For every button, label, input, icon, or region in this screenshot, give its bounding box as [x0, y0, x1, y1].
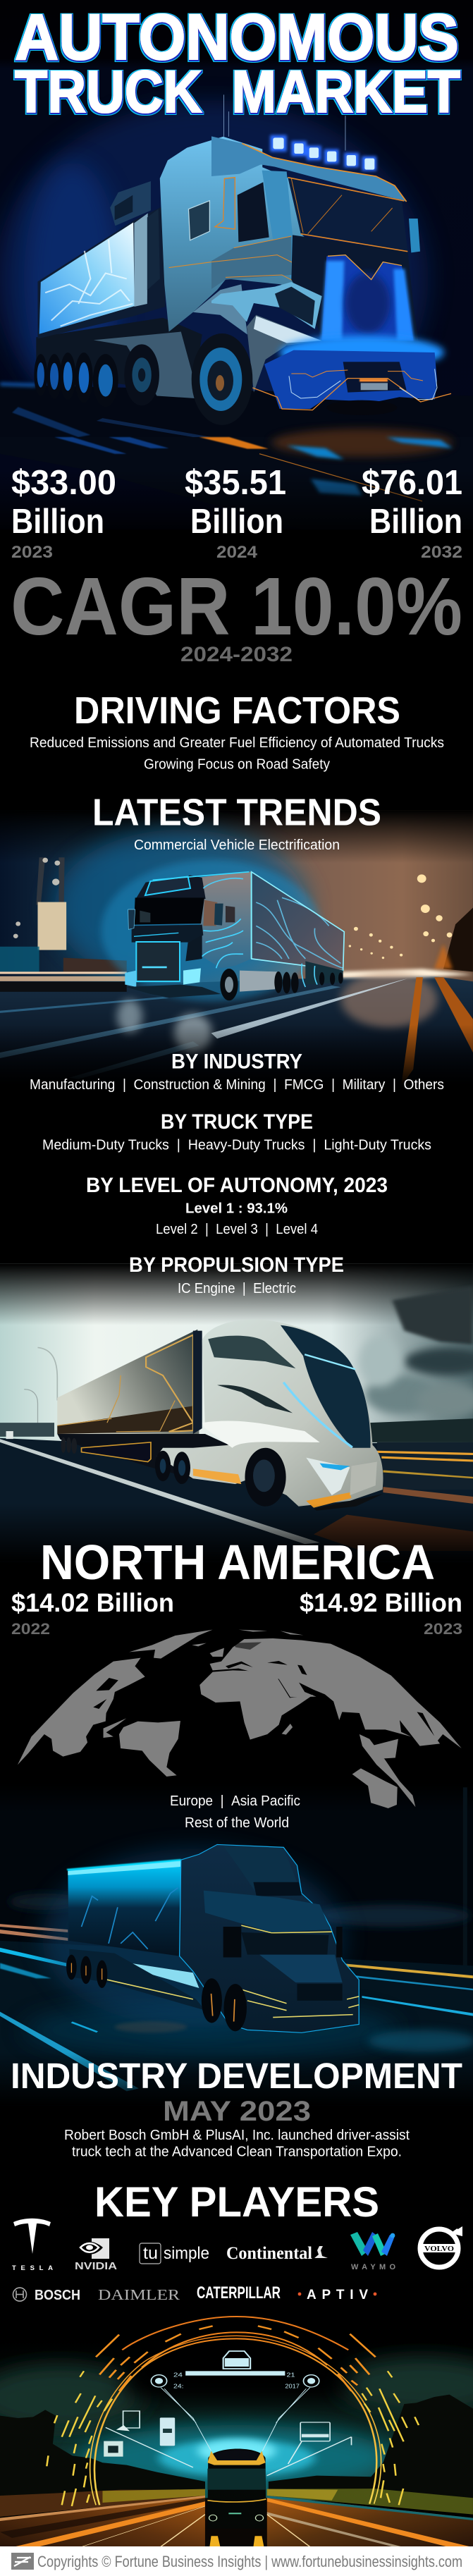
- road: [0, 1438, 473, 1562]
- iceland and arctic slivers: [192, 1630, 303, 1657]
- logo: Caterpillar: CATERPILLAR: [197, 2283, 281, 2302]
- CAGR: 2024-2032: [180, 643, 293, 666]
- by level of autonomy: Level 1 : 93.1%: [185, 1201, 288, 1216]
- north america heading and values: $14.92 Billion: [300, 1588, 462, 1617]
- key player logos: [12, 2219, 462, 2303]
- wheels: [202, 1978, 222, 2023]
- stat 2024: 2024: [216, 543, 258, 562]
- wheels: [245, 1448, 286, 1507]
- industry development: Robert Bosch GmbH & PlusAI, Inc. launched driver-assist: [64, 2128, 410, 2143]
- north america heading and values: [11, 1535, 462, 1638]
- regions list: Rest of the World: [185, 1815, 289, 1831]
- by level of autonomy: BY LEVEL OF AUTONOMY, 2023: [86, 1174, 388, 1197]
- interface icons: 24: [173, 2372, 183, 2379]
- by industry: BY INDUSTRY: [171, 1050, 302, 1074]
- greenland: [129, 1630, 213, 1659]
- by propulsion type: BY PROPULSION TYPE: [129, 1253, 344, 1277]
- regions list: [170, 1793, 300, 1831]
- by level of autonomy: [86, 1174, 388, 1237]
- interface icons: 24:: [173, 2383, 184, 2390]
- north america: [18, 1658, 145, 1765]
- road: [0, 1941, 473, 2105]
- neon truck: [101, 860, 344, 1001]
- stat 2032: [362, 464, 462, 562]
- madagascar: [282, 1724, 293, 1735]
- industry development: INDUSTRY DEVELOPMENT: [11, 2056, 462, 2096]
- cab: [180, 1844, 359, 2032]
- stat 2023: Billion: [11, 503, 104, 541]
- stat 2023: 2023: [11, 543, 53, 562]
- logo: TuSimple: [140, 2243, 209, 2264]
- logo: NVIDIA: [75, 2238, 117, 2272]
- roof lights: [270, 135, 376, 171]
- trailer: [37, 207, 165, 338]
- stat 2023: [11, 464, 116, 562]
- logo: Tesla: [12, 2219, 53, 2272]
- latest trends: Commercial Vehicle Electrification: [134, 838, 340, 853]
- segmentation text: [30, 1050, 444, 1296]
- stat 2024: Billion: [190, 503, 283, 541]
- north america heading and values: 2023: [424, 1620, 462, 1638]
- cab: [125, 872, 252, 998]
- by industry: [30, 1050, 444, 1093]
- latest trends: [92, 791, 381, 853]
- logo: TuSimple: simple: [164, 2244, 209, 2263]
- stat 2032: $76.01: [362, 464, 462, 502]
- footer logo: [11, 2553, 34, 2570]
- rear wheels and chassis: [34, 318, 202, 407]
- by propulsion type: [129, 1253, 344, 1296]
- globe with continents: [18, 1630, 462, 1808]
- road: [0, 974, 473, 1086]
- logo: TuSimple: tu: [143, 2244, 158, 2263]
- logo: Volvo: [420, 2226, 462, 2267]
- cab side: [160, 137, 324, 332]
- logo: Waymo: [350, 2232, 395, 2271]
- driving factors: Reduced Emissions and Greater Fuel Efficiency of Automated Trucks: [30, 735, 444, 751]
- logo: Continental: Continental: [226, 2244, 312, 2263]
- central america link: [104, 1718, 126, 1738]
- road continuing beneath the hero truck: [0, 429, 473, 599]
- by truck type: [42, 1110, 431, 1153]
- stat 2024: [185, 464, 286, 562]
- road: [0, 2496, 473, 2547]
- north america heading and values: 2022: [11, 1620, 50, 1638]
- logo: Daimler: DAIMLER: [98, 2286, 180, 2303]
- hero illustration: glowing blue truck: [0, 0, 473, 529]
- industry development: [11, 2056, 462, 2160]
- by level of autonomy: Level 2 | Level 3 | Level 4: [156, 1222, 318, 1237]
- latest trends: LATEST TRENDS: [92, 791, 381, 833]
- grass verges: [0, 2489, 473, 2517]
- logo: Tesla: TESLA: [12, 2264, 53, 2272]
- eurasia: [210, 1638, 462, 1748]
- logo: NVIDIA: NVIDIA: [75, 2260, 117, 2272]
- south america: [119, 1721, 180, 1777]
- africa: [199, 1670, 314, 1740]
- footer band: [0, 2546, 473, 2576]
- teal horizon glow: [80, 2425, 393, 2491]
- trailer: [252, 872, 344, 987]
- stat 2023: $33.00: [11, 464, 116, 502]
- industry development: truck tech at the Advanced Clean Transportation Expo.: [72, 2145, 402, 2160]
- glow: [42, 1848, 344, 2027]
- inland seas and lakes: [93, 1642, 307, 1709]
- driving factors: Growing Focus on Road Safety: [144, 757, 330, 773]
- key players heading: KEY PLAYERS: [94, 2178, 379, 2226]
- by industry: Manufacturing | Construction & Mining | FMCG | Military | Others: [30, 1077, 444, 1093]
- industry development: MAY 2023: [163, 2096, 311, 2127]
- market size figures: [11, 464, 462, 562]
- driving factors: [30, 689, 444, 773]
- interface icons: 2017: [285, 2383, 300, 2390]
- image: white futuristic truck: [0, 1264, 473, 1562]
- logo: Volvo: VOLVO: [424, 2245, 454, 2253]
- logo: Aptiv: APTIV: [307, 2288, 368, 2302]
- interface icons: [104, 2351, 352, 2476]
- front wheel: [192, 333, 252, 425]
- trailer: [68, 1860, 181, 1956]
- image: dark blue truck with cyan trailer: [0, 1784, 473, 2105]
- by propulsion type: IC Engine | Electric: [178, 1281, 296, 1296]
- image: night highway background: [0, 810, 473, 1086]
- truck rear: [207, 2449, 266, 2546]
- regions list: Europe | Asia Pacific: [170, 1793, 300, 1809]
- hero truck front with glowing grille: [192, 135, 451, 425]
- logo: Bosch: [13, 2288, 80, 2303]
- stat 2024: $35.51: [185, 464, 286, 502]
- stat 2032: Billion: [369, 503, 462, 541]
- by truck type: BY TRUCK TYPE: [161, 1110, 313, 1134]
- north america heading and values: $14.02 Billion: [11, 1588, 174, 1617]
- logo: Bosch: BOSCH: [35, 2288, 80, 2303]
- wheels and side skirt: [220, 969, 299, 1000]
- southeast asia islands: [360, 1734, 415, 1807]
- cab body: [157, 1320, 383, 1507]
- bumper: [252, 336, 451, 415]
- grille glow: [321, 255, 414, 341]
- image: truck under arcs on sunset road: [0, 2317, 473, 2547]
- storm clouds: [359, 1286, 473, 1417]
- interface icons: 21: [287, 2372, 295, 2379]
- tree lines: [0, 2395, 473, 2501]
- north america heading and values: NORTH AMERICA: [40, 1535, 435, 1590]
- arcs: [47, 2317, 419, 2506]
- by truck type: Medium-Duty Trucks | Heavy-Duty Trucks | Light-Duty Trucks: [42, 1138, 431, 1153]
- stat 2032: 2032: [421, 543, 462, 562]
- australia: [352, 1768, 398, 1808]
- logo: Waymo: WAYMO: [351, 2263, 395, 2271]
- street lights: [349, 874, 452, 959]
- driving factors: DRIVING FACTORS: [74, 689, 400, 732]
- title: [15, 1, 460, 125]
- trailer: [57, 1330, 199, 1434]
